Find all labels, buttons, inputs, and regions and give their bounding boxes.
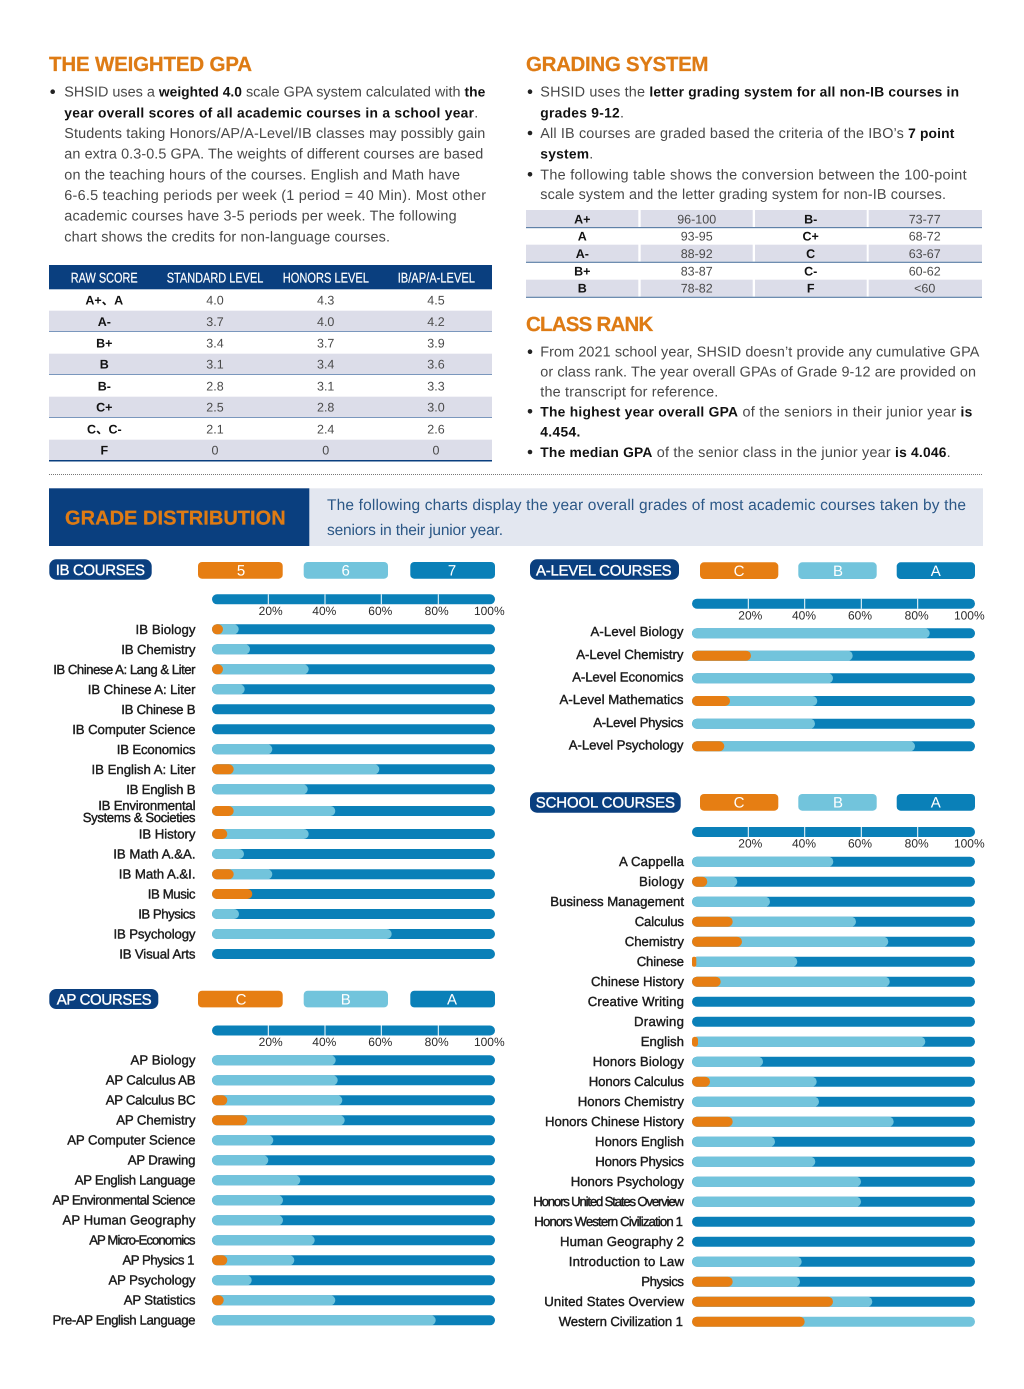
text block: weighted GPA explanation: 6-6.5 teaching periods per week (1 period = 40 Min). Most other [64,188,486,204]
percent axis [212,594,505,618]
row: A-Level Economics: A-Level Economics [572,670,684,684]
row: C+: 3.0 [427,401,445,415]
text block: grading system explanation: scale system and the letter grading system for non-IB courses. [540,187,946,203]
row: United States Overview [544,1294,975,1309]
text block: class rank explanation: The median GPA of the senior class in the junior year is 4.046. [540,445,951,461]
row: B+ and C-: 60-62 [909,264,941,278]
row: A-Level Mathematics [560,692,975,707]
text block: grading system explanation: grades 9-12. [540,105,624,121]
table: letter grade conversion [526,210,982,298]
row: Honors Calculus [589,1074,975,1089]
row: A- [49,311,492,332]
percent axis: 40% [792,836,816,850]
row: Honors English: Honors English [595,1134,684,1149]
row: A- and C: C [806,247,815,261]
row: IB Chinese B: IB Chinese B [121,702,196,717]
row: F: 0 [322,444,329,458]
row: Honors Calculus: Honors Calculus [589,1074,684,1089]
row: C, C- [87,422,445,436]
panel: the weighted GPA [49,53,492,462]
row: AP Psychology: AP Psychology [108,1272,196,1288]
heading: the weighted GPA: THE WEIGHTED GPA [49,53,252,76]
heading: class rank: CLASS RANK [526,313,653,336]
pill heading: school courses: SCHOOL COURSES [536,795,675,812]
row: Honors Chemistry: Honors Chemistry [578,1094,684,1109]
chart: school courses [530,792,985,1329]
percent axis: 20% [259,1035,283,1049]
legend: IB grades [198,562,495,580]
text block: class rank explanation: 4.454. [540,425,580,440]
row: Calculus: Calculus [635,914,684,929]
row: IB Computer Science [72,722,495,737]
row: A-Level Physics [593,715,975,730]
legend: A-Level grades: B [833,563,843,580]
row: Honors Biology [593,1054,975,1069]
row: A Cappella: A Cappella [619,854,685,869]
row: B+ and C-: 83-87 [681,264,713,278]
text block: grading system explanation: All IB courses are graded based the criteria of the IBO’s 7 point [540,126,955,142]
row: AP Biology [130,1052,495,1068]
row: IB Physics [138,906,495,922]
legend: school grades: C [734,794,745,812]
row: Honors Psychology [571,1174,975,1189]
row: AP Micro-Economics [89,1232,495,1248]
panel: class rank [526,313,980,461]
row: B+ and C- [574,264,941,278]
row: B-: 3.1 [317,379,334,393]
row: A-Level Biology [590,624,975,639]
percent axis [212,1026,505,1049]
row: AP Computer Science: AP Computer Science [67,1132,196,1148]
row: IB Chinese A: Liter: IB Chinese A: Liter [88,682,196,697]
legend: IB grades: 6 [342,562,350,580]
percent axis: 80% [425,1035,449,1049]
text block: grading system explanation: The following table shows the conversion between the 100-point [540,167,967,183]
row: C+: 2.5 [206,401,224,415]
row: AP Calculus AB [106,1072,495,1088]
percent axis: 100% [954,608,985,622]
legend: A-Level grades: C [734,563,745,580]
row: AP Computer Science [67,1132,495,1148]
percent axis: 20% [259,604,283,618]
row: Human Geography 2 [560,1234,975,1249]
pill heading: AP courses: AP COURSES [57,992,152,1009]
row: IB Music: IB Music [148,886,196,902]
row: A-Level Psychology: A-Level Psychology [569,738,684,752]
row: AP Human Geography [62,1212,495,1228]
row: Chinese History: Chinese History [591,974,684,989]
row: C, C-: 2.4 [317,422,334,436]
panel: grading system [526,53,982,298]
row: IB English A: Liter [92,762,495,777]
percent axis: 80% [905,608,929,622]
text block: grading system explanation [528,85,967,203]
table header [49,265,492,289]
row: IB History: IB History [139,826,196,842]
row: IB Chemistry [121,642,495,657]
banner description: The following charts display the year overall grades of most academic courses taken by the [327,497,966,514]
row: C, C-: 2.6 [427,422,445,436]
table header: RAW SCORE [71,269,138,285]
row: IB Biology: IB Biology [136,622,196,637]
row: English: English [641,1034,684,1049]
row: B-: 3.3 [427,379,445,393]
text block: class rank explanation [528,345,980,461]
row: B and F: F [807,282,815,296]
row: B+ [96,336,445,350]
row: A- and C [526,245,982,263]
row: AP English Language [75,1172,495,1188]
table header: STANDARD LEVEL [167,269,264,285]
banner description [327,497,966,539]
row: A-Level Economics [572,670,975,684]
banner description: seniors in their junior year. [327,522,503,539]
row: Biology: Biology [639,874,684,889]
row: A and C+: 68-72 [909,230,941,244]
chart: AP courses [49,989,505,1328]
row: Introduction to Law: Introduction to Law [569,1254,684,1269]
row: A+, A: 4.0 [206,293,224,307]
row: Honors Chinese History: Honors Chinese History [545,1114,684,1129]
row: IB Psychology [114,926,495,942]
row: IB Environmental Systems & Societies: IB Environmental [98,798,196,813]
row: Chinese: Chinese [637,954,684,969]
row: Chinese [637,954,975,969]
row: A+ and B-: A+ [574,212,590,226]
percent axis: 100% [474,1035,505,1049]
row: Pre-AP English Language [52,1312,495,1328]
row: B-: B- [98,379,111,393]
table: raw score to GPA credits [49,265,492,462]
percent axis: 60% [848,608,872,622]
row: A+ and B-: B- [804,212,817,226]
percent axis: 20% [738,836,763,850]
row: IB English B [126,782,495,797]
row: A+ and B- [526,210,982,228]
row: Honors Western Civilization 1 [534,1214,975,1229]
row: IB Chinese B [121,702,495,717]
row: B and F [526,280,982,298]
percent axis: 40% [312,604,337,618]
row: B and F: B [578,282,587,296]
row: A-Level Mathematics: A-Level Mathematics [560,692,684,707]
row: AP Chemistry: AP Chemistry [116,1112,196,1128]
row: Business Management: Business Management [550,894,684,909]
row: A+ and B-: 96-100 [677,212,716,226]
row: C+: 2.8 [317,401,334,415]
row: B: 3.6 [427,358,445,372]
row: IB Physics: IB Physics [138,906,196,922]
row: A-: A- [98,315,111,329]
row: A- and C: 88-92 [681,247,713,261]
text block: grading system explanation: SHSID uses the letter grading system for all non-IB courses in [540,85,959,101]
row: Honors Western Civilization 1: Honors Western Civilization 1 [534,1214,683,1229]
row: Western Civilization 1: Western Civilization 1 [559,1314,683,1329]
row: IB Chinese A: Liter [88,682,495,697]
row: Honors Physics: Honors Physics [595,1154,684,1169]
text block: weighted GPA explanation: year overall scores of all academic courses in a school year. [64,105,478,121]
row: C, C-: 2.1 [206,422,224,436]
row: Western Civilization 1 [559,1314,975,1329]
percent axis: 20% [738,608,763,622]
row: AP Physics 1 [122,1252,495,1268]
chart: A-Level courses [530,559,985,752]
row: IB Computer Science: IB Computer Science [72,722,196,737]
row: AP Drawing: AP Drawing [128,1152,195,1168]
legend: AP grades: B [341,992,351,1008]
row: B+ and C-: B+ [574,264,590,278]
row: IB Chinese A: Lang & Liter [53,662,495,677]
row: A Cappella [619,854,975,869]
row: B+: B+ [96,336,112,350]
row: AP Chemistry [116,1112,495,1128]
row: IB Environmental Systems & Societies: Systems & Societies [83,810,196,825]
row: Chinese History [591,974,975,989]
row: F [49,440,492,462]
row: A-Level Physics: A-Level Physics [593,715,684,730]
legend: IB grades: 7 [448,562,456,580]
percent axis: 100% [474,604,505,618]
row: A-Level Biology: A-Level Biology [590,624,684,639]
row: Physics [641,1274,975,1289]
percent axis: 40% [792,608,816,622]
row: IB Psychology: IB Psychology [114,926,196,942]
row: AP Environmental Science: AP Environmental Science [52,1192,196,1208]
percent axis [692,827,985,850]
row: IB Math A.&I. [119,866,495,882]
row: AP Psychology [108,1272,495,1288]
row: IB Visual Arts [119,946,495,962]
text block: class rank explanation: the transcript for reference. [540,384,718,400]
row: IB Math A.&I.: IB Math A.&I. [119,866,196,882]
row: United States Overview: United States Overview [544,1294,684,1309]
row: English [641,1034,975,1049]
row: Drawing: Drawing [634,1014,684,1029]
row: Honors English [595,1134,975,1149]
row: Business Management [550,894,975,909]
row: Pre-AP English Language: Pre-AP English Language [52,1312,196,1328]
row: Honors United States Overview [533,1194,975,1209]
text block: weighted GPA explanation: an extra 0.3-0.5 GPA. The weights of different courses are based [64,147,483,163]
row: Drawing [634,1014,975,1029]
row: AP Physics 1: AP Physics 1 [122,1252,194,1268]
row: Introduction to Law [569,1254,975,1269]
row: AP Environmental Science [52,1192,495,1208]
row: A and C+: A [578,230,587,244]
row: B- [98,379,445,393]
row: IB Math A.&A. [113,846,495,862]
row: A-: 4.0 [317,315,334,329]
pill heading: A-Level courses: A-LEVEL COURSES [536,562,672,579]
chart: IB courses [49,559,505,962]
text block: weighted GPA explanation: SHSID uses a weighted 4.0 scale GPA system calculated with the [64,85,486,101]
row: B [49,354,492,375]
row: AP Calculus BC [106,1092,495,1108]
row: A-Level Chemistry: A-Level Chemistry [576,647,684,662]
row: A+, A: 4.3 [317,293,334,307]
row: A- and C: A- [576,247,589,261]
percent axis [692,599,985,622]
percent axis: 40% [312,1035,337,1049]
row: A+ and B-: 73-77 [909,212,941,226]
row: A and C+: C+ [803,230,819,244]
legend: school grades [700,794,975,812]
row: AP Calculus AB: AP Calculus AB [106,1072,196,1088]
row: IB English B: IB English B [126,782,196,797]
row: A-: 3.7 [206,315,224,329]
percent axis: 100% [954,836,985,850]
row: IB Economics: IB Economics [117,742,196,757]
legend: AP grades [198,991,495,1008]
row: Chemistry: Chemistry [625,934,684,949]
text block: class rank explanation: The highest year overall GPA of the seniors in their junior year is [540,404,973,420]
text block: weighted GPA explanation: academic courses have 3-5 periods per week. The following [64,209,457,225]
row: Chemistry [625,934,975,949]
row: A- and C: 63-67 [909,247,941,261]
pill heading: IB courses: IB COURSES [56,562,145,579]
row: B and F: 78-82 [681,282,713,296]
text block: weighted GPA explanation [50,85,486,245]
legend: A-Level grades [700,562,975,580]
text block: class rank explanation: or class rank. The year overall GPAs of Grade 9-12 are provided on [540,365,976,381]
row: Calculus [635,914,975,929]
text block: grading system explanation: system. [540,147,593,163]
row: Biology [639,874,975,889]
row: Creative Writing [588,994,975,1009]
legend: AP grades: A [447,992,457,1008]
percent axis: 80% [905,836,929,850]
table header: IB/AP/A-LEVEL [398,269,475,285]
row: C, C-: C、C- [87,422,122,436]
row: IB Visual Arts: IB Visual Arts [119,946,196,962]
row: AP Statistics: AP Statistics [124,1292,196,1308]
percent axis: 60% [368,1035,393,1049]
row: AP Statistics [124,1292,495,1308]
row: IB Math A.&A.: IB Math A.&A. [113,846,196,862]
legend: A-Level grades: A [931,563,941,580]
legend: school grades: A [931,794,941,812]
heading: grading system: GRADING SYSTEM [526,53,708,76]
row: C+: C+ [96,401,112,415]
row: A and C+ [578,230,941,244]
row: Honors Chemistry [578,1094,975,1109]
row: B+: 3.9 [427,336,445,350]
percent axis: 80% [425,604,449,618]
banner: grade distribution [49,488,983,546]
row: Honors Psychology: Honors Psychology [571,1174,684,1189]
percent axis: 60% [368,604,393,618]
row: F: 0 [212,444,219,458]
row: AP Micro-Economics: AP Micro-Economics [89,1232,196,1248]
row: Honors United States Overview: Honors United States Overview [533,1194,684,1209]
row: Human Geography 2: Human Geography 2 [560,1234,684,1249]
row: Honors Chinese History [545,1114,975,1129]
legend: AP grades: C [236,992,247,1008]
text block: weighted GPA explanation: chart shows the credits for non-language courses. [64,229,390,245]
row: B+: 3.7 [317,336,334,350]
row: B-: 2.8 [206,379,224,393]
row: B: 3.4 [317,358,334,372]
row: AP English Language: AP English Language [75,1172,196,1188]
row: IB Chemistry: IB Chemistry [121,642,196,657]
row: Physics: Physics [641,1274,684,1289]
row: B: 3.1 [206,358,224,372]
row: F: F [100,444,108,458]
row: IB English A: Liter: IB English A: Liter [92,762,196,777]
row: IB Music [148,886,495,902]
row: B+ and C-: C- [804,264,817,278]
text block: weighted GPA explanation: Students taking Honors/AP/A-Level/IB classes may possibly gain [64,126,485,142]
row: B and F: <60 [914,282,935,296]
row: B+: 3.4 [206,336,224,350]
table header: HONORS LEVEL [283,269,369,285]
row: IB Environmental Systems & Societies [83,798,495,825]
row: F: 0 [433,444,440,458]
row: Honors Biology: Honors Biology [593,1054,684,1069]
row: A and C+: 93-95 [681,230,713,244]
row: AP Human Geography: AP Human Geography [62,1212,196,1228]
banner title: GRADE DISTRIBUTION [65,507,286,529]
row: A-: 4.2 [427,315,445,329]
row: AP Drawing [128,1152,495,1168]
text block: class rank explanation: From 2021 school year, SHSID doesn’t provide any cumulative GPA [540,345,980,361]
row: A+, A: 4.5 [427,293,445,307]
row: IB Biology [136,622,495,637]
row: A+, A [85,293,445,307]
percent axis: 60% [848,836,872,850]
row: IB Chinese A: Lang & Liter: IB Chinese A: Lang & Liter [53,662,196,677]
row: IB History [139,826,495,842]
legend: IB grades: 5 [237,562,245,580]
row: Honors Physics [595,1154,975,1169]
row: C+ [49,397,492,418]
row: Creative Writing: Creative Writing [588,994,684,1009]
row: AP Biology: AP Biology [130,1052,196,1068]
row: IB Economics [117,742,495,757]
legend: school grades: B [833,794,843,812]
row: A+, A: A+、A [85,293,123,307]
row: B: B [100,358,109,372]
row: AP Calculus BC: AP Calculus BC [106,1092,196,1108]
row: A-Level Psychology [569,738,975,752]
row: A-Level Chemistry [576,647,975,662]
text block: weighted GPA explanation: on the teaching hours of the courses. English and Math have [64,167,460,183]
